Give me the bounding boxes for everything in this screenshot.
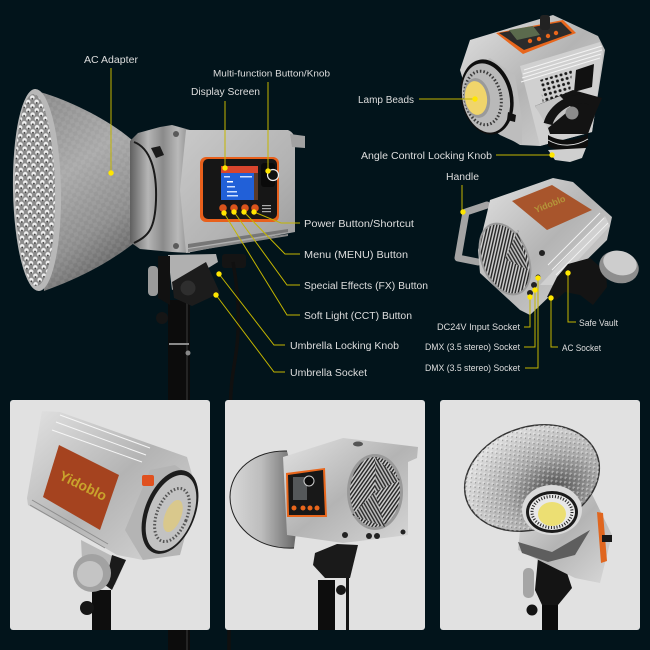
brand: Yidoblo	[533, 193, 567, 215]
control panel	[200, 157, 279, 222]
sockets	[527, 250, 545, 296]
vent holes	[540, 70, 572, 104]
switch	[574, 64, 594, 92]
label: AC Socket	[562, 343, 601, 353]
label plate	[43, 445, 119, 530]
label: Special Effects (FX) Button	[304, 281, 428, 292]
sockets	[342, 530, 406, 539]
neck collar	[130, 125, 190, 253]
body	[460, 15, 605, 146]
label: DMX (3.5 stereo) Socket	[425, 342, 520, 352]
mount bracket	[148, 254, 220, 306]
top control panel	[496, 15, 576, 54]
callout: DC24V Input Socket	[524, 294, 533, 327]
fan grille	[347, 454, 403, 530]
stand	[523, 558, 572, 630]
middle right light	[458, 178, 642, 315]
callout: Display Screen	[222, 101, 228, 171]
main light	[11, 89, 305, 306]
body	[283, 438, 418, 543]
orange edge	[597, 512, 607, 563]
label: Lamp Beads	[358, 95, 414, 106]
label: Safe Vault	[579, 318, 618, 328]
callout: Safe Vault	[565, 270, 576, 322]
handle	[458, 205, 487, 262]
callout: Angle Control Locking Knob	[496, 152, 555, 158]
callout: Handle	[460, 185, 466, 215]
display screen	[221, 166, 258, 200]
reflector cone	[40, 92, 134, 291]
callout: AC Socket	[548, 295, 558, 347]
label: DMX (3.5 stereo) Socket	[425, 363, 520, 373]
lamp collar	[125, 462, 210, 562]
label: Display Screen	[191, 87, 260, 98]
lamp beads	[538, 502, 566, 526]
orange button	[142, 475, 154, 486]
panel: side view with label plate	[10, 400, 210, 630]
bracket	[547, 258, 607, 305]
body	[180, 130, 295, 253]
label: DC24V Input Socket	[437, 322, 520, 333]
body	[478, 178, 612, 315]
knob	[261, 163, 278, 187]
handle nub	[290, 134, 305, 148]
label: AC Adapter	[84, 55, 139, 66]
label: Umbrella Socket	[290, 368, 367, 379]
labels	[84, 55, 618, 379]
callout: Umbrella Socket	[213, 292, 285, 372]
lamp base ring	[522, 485, 582, 535]
label: Menu (MENU) Button	[304, 250, 408, 261]
callout: DMX Socket upper	[524, 287, 538, 347]
silver knob	[73, 554, 111, 592]
callout: Multi-function Button/Knob	[265, 82, 271, 174]
callout: Soft Light Button	[221, 210, 300, 315]
callout: Menu Button	[241, 209, 300, 254]
stand	[80, 540, 126, 630]
brand: Yidoblo	[57, 467, 110, 504]
lamp beads	[463, 80, 489, 116]
dome reflector	[230, 451, 300, 548]
label: Power Button/Shortcut	[304, 219, 414, 230]
callout: Power Button/Shortcut	[251, 209, 300, 223]
body	[518, 490, 612, 583]
stand	[313, 544, 358, 630]
callout: Umbrella Locking Knob	[216, 271, 285, 345]
angle knob	[548, 148, 586, 162]
control panel	[286, 468, 327, 517]
panel: front view with lamp	[440, 400, 640, 630]
label: Handle	[446, 172, 479, 183]
label plate	[512, 185, 592, 230]
stand pole	[156, 300, 190, 650]
callout: DMX Socket lower	[525, 275, 541, 368]
body	[27, 411, 193, 560]
callout: Special Effects Button	[231, 209, 300, 285]
angle bracket	[535, 90, 602, 152]
leader lines and dots	[108, 68, 576, 372]
reflector	[450, 407, 614, 549]
label: Multi-function Button/Knob	[213, 68, 330, 80]
collar ring	[134, 142, 156, 243]
callout: AC Adapter	[108, 68, 114, 176]
power cable	[222, 254, 246, 650]
rear fan grille	[469, 215, 541, 303]
reflector rim	[11, 89, 63, 291]
lamp face	[454, 54, 522, 145]
safe vault knob	[596, 246, 642, 288]
label: Angle Control Locking Knob	[361, 151, 492, 162]
label: Soft Light (CCT) Button	[304, 311, 412, 322]
callout: Lamp Beads	[419, 96, 478, 102]
top right light	[454, 15, 605, 162]
panel: rear view with screen	[225, 400, 425, 630]
label: Umbrella Locking Knob	[290, 341, 399, 352]
buttons	[219, 204, 259, 212]
